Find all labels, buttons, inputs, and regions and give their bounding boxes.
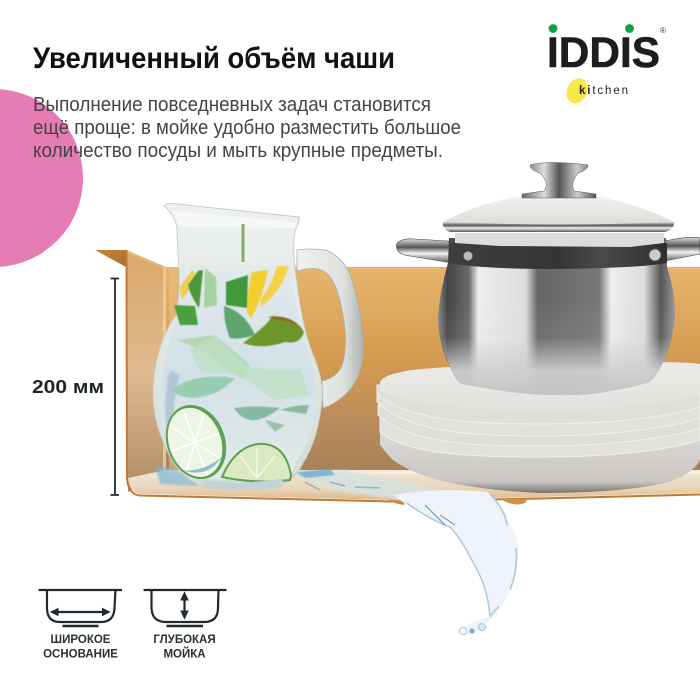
handle rivets [463,251,473,261]
logo: IDDIS kitchen [547,24,666,107]
fruit and leaves in the jug [171,266,310,432]
jug base [203,478,285,490]
jug handle [297,249,363,408]
light green leaves [178,335,250,378]
height label: 200 мм [32,377,104,397]
label: wide base [43,634,118,660]
label: wide base: ШИРОКОЕ [51,634,111,646]
label: deep bowl [153,634,216,660]
sink basin [95,250,700,505]
plate rims [380,415,700,457]
plates stack [377,362,700,493]
top plate [380,362,700,411]
jug rim highlight [172,210,298,228]
pot body [438,238,675,395]
lid knob [522,162,596,198]
label: deep bowl: МОЙКА [163,648,206,660]
description text [33,94,461,162]
logo: IDDIS kitchen: IDDIS [547,29,660,77]
description text: Выполнение повседневных задач становится [33,94,431,116]
lid rim [443,222,674,232]
logo: IDDIS kitchen: ® [660,26,666,35]
pot dark band [449,243,667,269]
label: wide base: ОСНОВАНИЕ [43,648,118,660]
right handle [652,237,700,262]
description text: ещё проще: в мойке удобно разместить большое [33,117,461,139]
water on sink floor [155,466,470,500]
drain lip [388,500,406,505]
decorative pink circle [0,89,83,267]
sink left wall [126,250,166,492]
sink top rim [95,250,126,267]
jug glass body [153,203,322,490]
icon: deep bowl [144,590,226,626]
deep bottom plate [380,430,700,493]
mint stem [242,224,244,262]
height dimension line [110,278,119,495]
sink floor [128,470,700,500]
logo: IDDIS kitchen: kitchen [579,85,630,97]
sink back wall [165,267,700,477]
jug with lime water [153,203,363,490]
water stream falling from sink [393,490,518,635]
label: deep bowl: ГЛУБОКАЯ [153,634,216,646]
glass lid dome [443,196,674,224]
lemon wedges [247,270,268,318]
big lime slice [156,396,236,488]
title: Увеличенный объём чаши [33,42,395,75]
small lime slice [222,444,291,481]
dark lime half [243,316,304,346]
sink outer edge [126,250,700,502]
dark green mint leaves [188,270,203,308]
left handle [397,239,470,263]
description text: количество посуды и мыть крупные предметы. [33,140,443,162]
steel pot with glass lid [397,162,700,395]
icon: wide base [38,590,122,626]
jug water [161,265,316,480]
